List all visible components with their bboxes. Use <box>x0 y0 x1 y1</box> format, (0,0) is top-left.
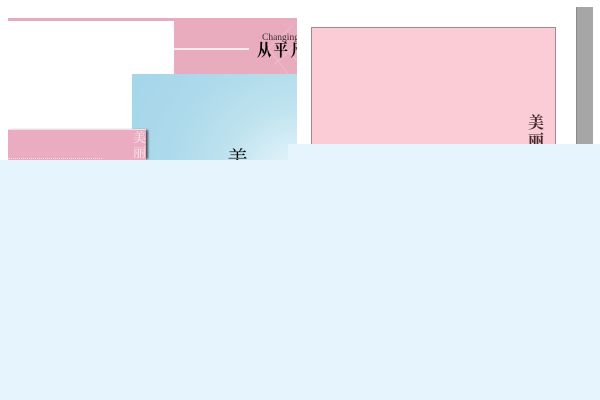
grey scrollbar strip <box>576 7 593 160</box>
overlay: pale blue lower panel <box>0 160 600 400</box>
panel: pink article card <box>311 27 556 160</box>
article vertical title: 美 <box>528 115 544 132</box>
overlay: pale blue upper step <box>288 144 600 160</box>
article vertical title: 丽 <box>528 133 544 150</box>
banner diamond pattern <box>266 26 297 74</box>
decorative white rule <box>174 48 249 50</box>
side card vertical title: 丽 <box>133 145 146 160</box>
panel: blue gradient feature <box>132 74 297 160</box>
panel: pink side card <box>8 129 146 160</box>
side card dotted rule <box>8 158 102 159</box>
article vertical title <box>528 114 544 150</box>
top pink strip <box>8 18 297 21</box>
side card vertical title: 美 <box>133 130 146 145</box>
left page: magazine spread <box>8 18 297 160</box>
side card vertical title <box>133 130 146 160</box>
panel: pink title banner <box>174 21 297 74</box>
